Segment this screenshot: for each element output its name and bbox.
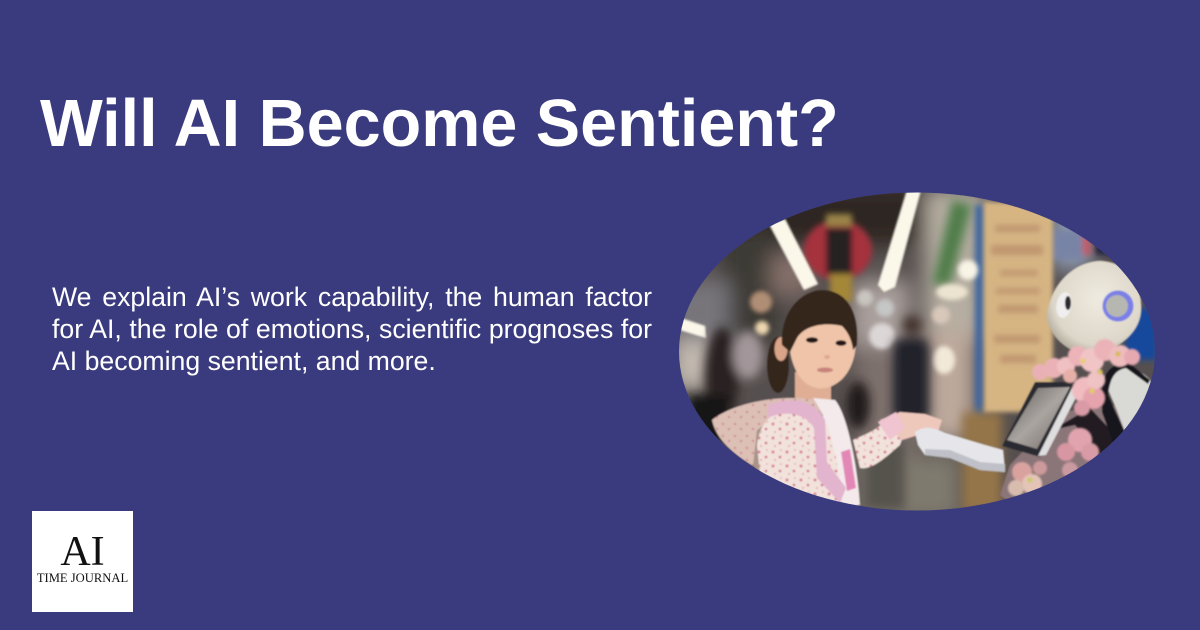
logo: AI Time Journal — [32, 511, 133, 612]
ceiling light tubes — [680, 190, 921, 338]
red lantern — [804, 214, 872, 302]
head — [1047, 261, 1141, 355]
logo mark AI: AI — [60, 529, 105, 575]
shoulder — [1103, 368, 1152, 432]
background people — [688, 315, 929, 510]
neck — [795, 372, 831, 406]
bokeh lights — [750, 260, 978, 374]
backpack strap — [768, 400, 846, 503]
hood shadow — [752, 426, 762, 471]
green awning — [932, 200, 972, 285]
ear — [774, 337, 788, 361]
sleeve — [852, 425, 902, 470]
black strap — [1102, 362, 1150, 448]
robot — [915, 261, 1152, 510]
text block: description: We explain AI’s work capability, the human factor for AI, the role of emotions, scientific prognoses for AI becoming sentient, and more. — [52, 282, 652, 376]
girl — [712, 290, 942, 506]
flower garland — [1008, 339, 1140, 496]
torso — [1000, 405, 1123, 499]
arm — [915, 428, 1005, 472]
tablet — [1002, 382, 1081, 457]
blurred sign board — [984, 202, 1053, 412]
ear ring — [1102, 290, 1134, 322]
hood — [712, 398, 822, 466]
wooden post below sign — [962, 412, 1002, 512]
face — [789, 320, 856, 388]
logo wordmark: TIME JOURNAL — [37, 571, 128, 585]
body — [757, 408, 858, 506]
hair — [782, 290, 857, 352]
hand — [880, 412, 942, 440]
shirt front — [813, 398, 860, 505]
ponytail — [767, 337, 789, 393]
robot eye — [1056, 292, 1072, 318]
eyes and mouth — [806, 337, 818, 343]
photo: girl and robot in oval frame — [679, 192, 1155, 510]
blurred market background — [670, 185, 1170, 520]
blue and dark signs — [975, 195, 1157, 415]
title: Will AI Become Sentient? — [40, 87, 839, 161]
page background — [32, 98, 1155, 612]
